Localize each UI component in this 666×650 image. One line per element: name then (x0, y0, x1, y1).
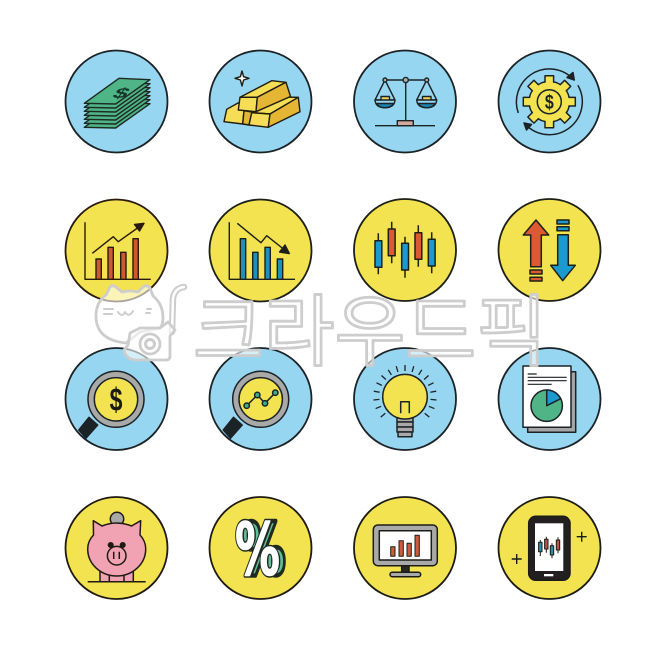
icon: light bulb (354, 348, 456, 450)
percent face: % (235, 508, 280, 593)
lens (88, 371, 144, 427)
down arrow (551, 220, 575, 281)
stand (390, 566, 421, 577)
watermark logo (96, 286, 547, 376)
circle background (498, 50, 600, 152)
sparkle (235, 71, 249, 86)
circle background (210, 200, 312, 302)
face (107, 543, 126, 565)
circle background (66, 348, 168, 450)
icon: percent sign (210, 497, 312, 599)
gear (523, 76, 575, 128)
ground line (88, 581, 146, 583)
circle background (354, 497, 456, 599)
circle background (66, 497, 168, 599)
circle background (210, 50, 312, 152)
legs (100, 568, 133, 582)
left bar (224, 103, 256, 124)
cat head (96, 286, 163, 343)
wicks (378, 222, 432, 278)
left pan (375, 80, 395, 108)
back page (528, 372, 576, 432)
handle (78, 412, 103, 438)
icon: money stack (66, 50, 168, 152)
icon: smartphone with candlesticks (498, 497, 600, 599)
top bar (238, 81, 290, 112)
beam and post (385, 80, 427, 121)
icon: report with pie chart (498, 348, 600, 450)
plus marks (512, 532, 587, 564)
icon: falling bar chart (210, 200, 312, 302)
pivots (383, 77, 429, 83)
circle background (210, 497, 312, 599)
body with ears (88, 521, 146, 576)
blue candles (375, 239, 435, 270)
cat tail (172, 287, 184, 332)
lens dollar sign: $ (110, 382, 123, 417)
dollar sign: $ (109, 85, 134, 101)
gear dollar sign: $ (545, 91, 554, 113)
phone body (529, 516, 570, 580)
circle background (498, 497, 600, 599)
axes (85, 222, 151, 279)
icon: rising bar chart (66, 200, 168, 302)
pie chart (531, 390, 562, 421)
monitor frame (373, 525, 437, 566)
circle background (66, 50, 168, 152)
front page (523, 366, 571, 427)
bulb screw base (397, 417, 413, 437)
line chart (244, 390, 278, 408)
bars (96, 239, 138, 279)
icon: gear with dollar (498, 50, 600, 152)
circle background (66, 200, 168, 302)
filament (401, 402, 409, 413)
stacked bills (84, 78, 150, 128)
circle background (354, 50, 456, 152)
percent shadow: % (241, 508, 286, 593)
gap shadow (243, 111, 252, 125)
handle (223, 412, 248, 438)
red candles (388, 229, 422, 259)
camera lens (140, 334, 160, 354)
trend arrow (92, 223, 144, 253)
icon: magnifier with dollar (66, 348, 168, 450)
coin (110, 512, 124, 526)
axes (229, 222, 295, 279)
bars (240, 239, 283, 279)
icon: gold bars (210, 50, 312, 152)
icon: monitor with chart (354, 497, 456, 599)
glass (383, 374, 427, 419)
phone screen (535, 523, 563, 571)
up arrow (523, 220, 549, 281)
circle background (498, 348, 600, 450)
icon: candlestick chart (354, 199, 456, 301)
circle background (210, 348, 312, 450)
light rays (373, 365, 437, 417)
base (375, 121, 435, 126)
right bar (249, 97, 300, 127)
percent outline: % (235, 508, 280, 593)
circle background (354, 199, 456, 301)
watermark wordmark: 크라우드픽 (193, 288, 547, 376)
cat face (104, 309, 151, 315)
lens (233, 371, 289, 427)
home button (544, 574, 553, 576)
mini candlesticks (539, 537, 560, 558)
icon: balance scale (354, 50, 456, 152)
screen (379, 531, 431, 560)
report text lines (528, 374, 567, 384)
icon: piggy bank (66, 497, 168, 599)
icon: up and down arrows (498, 199, 600, 301)
cycle arrows (516, 69, 582, 135)
circle background (354, 348, 456, 450)
circle background (498, 199, 600, 301)
icon: magnifier with line chart (210, 348, 312, 450)
right pan (417, 80, 437, 108)
bars (391, 535, 419, 556)
trend arrow (237, 223, 289, 254)
camera (124, 322, 175, 360)
